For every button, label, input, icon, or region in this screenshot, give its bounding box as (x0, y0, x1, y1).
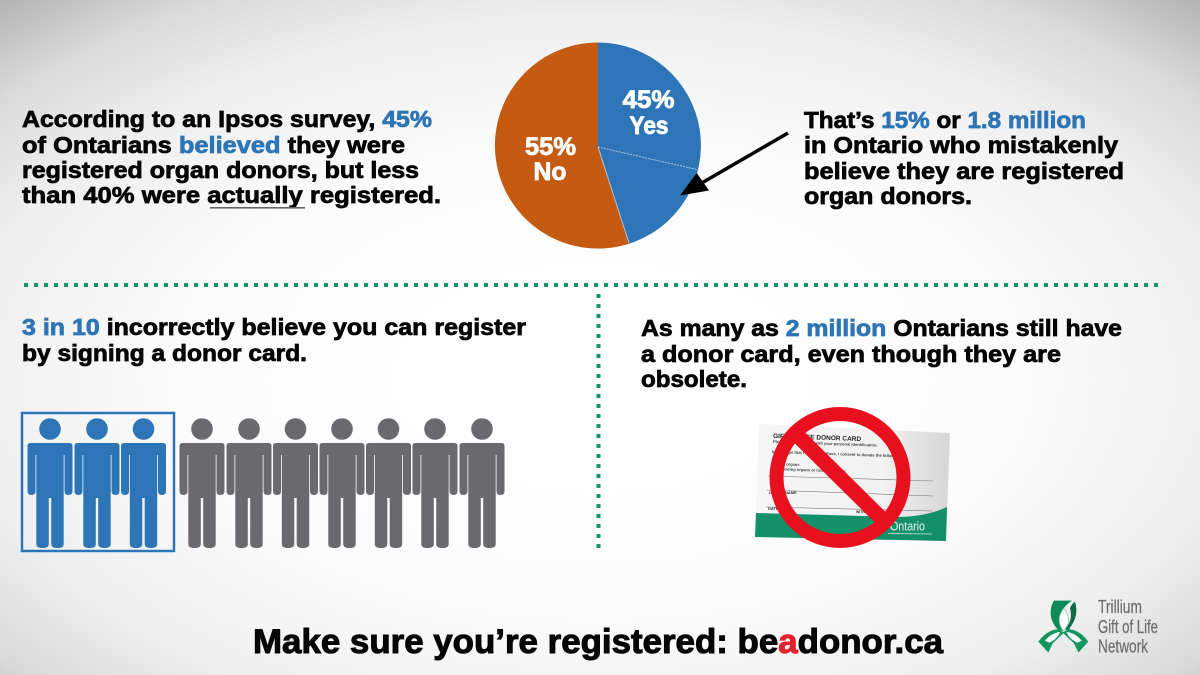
text block: 2 million donor cards: a donor card, even though they are (641, 341, 1061, 367)
grey figures (180, 418, 504, 548)
donor card: DONOR NAME (769, 490, 797, 495)
text block: 15% or 1.8 million: in Ontario who mistakenly (804, 132, 1118, 158)
text block: 3 in 10 (22, 314, 526, 366)
donor card: GIFT OF LIFE DONOR CARD (773, 433, 862, 443)
text block: 2 million donor cards: As many as 2 million Ontarians still have (641, 315, 1122, 341)
pie chart: No (534, 158, 566, 186)
people pictogram: 3 in 10 (22, 413, 504, 551)
text block: 3 in 10: 3 in 10 incorrectly believe you can register (22, 314, 526, 340)
text block: survey finding: of Ontarians believed they were (22, 132, 405, 158)
donor card: DATE (768, 506, 779, 511)
donor card: Please keep this card with your personal identification. (773, 439, 878, 448)
text block: 2 million donor cards (641, 315, 1122, 392)
text block: 15% or 1.8 million: organ donors. (804, 183, 972, 209)
pie chart: 55% (525, 133, 576, 161)
donor card: the following organs or tissue (specify) (771, 466, 846, 474)
logo wordmark: Network (1098, 636, 1149, 656)
logo wordmark: Trillium (1098, 597, 1142, 617)
text block: survey finding: than 40% were actually registered. (22, 182, 441, 208)
arrow (680, 133, 788, 196)
highlight box with blue figures (22, 413, 174, 551)
text block: 15% or 1.8 million: believe they are registered (804, 158, 1124, 184)
text block: 3 in 10: by signing a donor card. (22, 340, 307, 366)
logo: Trillium Gift of Life Network (1038, 597, 1158, 656)
logo wordmark: Gift of Life (1098, 617, 1158, 637)
pie chart: Yes (630, 112, 668, 140)
text block: 15% or 1.8 million: That’s 15% or 1.8 million (804, 107, 1086, 133)
pie chart (495, 42, 701, 248)
icon: crossed-out donor card (755, 414, 950, 541)
donor card: needed organs (771, 461, 800, 467)
text block: survey finding: According to an Ipsos survey, 45% (22, 106, 432, 132)
text block: 2 million donor cards: obsolete. (641, 366, 747, 392)
icon: trillium (1038, 601, 1088, 653)
donor card: In the hope that I may help others, I consent to donate the following in (772, 449, 906, 459)
call to action: Make sure you’re registered: be adonor.ca (253, 623, 944, 661)
donor card: WITNESS (856, 510, 873, 514)
text block: survey finding: registered organ donors, but less (22, 157, 419, 183)
text block: 15% or 1.8 million (804, 107, 1124, 209)
donor card: Ontario (890, 518, 925, 534)
dotted dividers (24, 285, 1158, 554)
logo wordmark (1098, 597, 1158, 656)
text block: survey finding (22, 106, 441, 209)
prohibition sign (776, 414, 904, 541)
donor card (755, 424, 950, 541)
pie chart: 45% (622, 86, 674, 114)
